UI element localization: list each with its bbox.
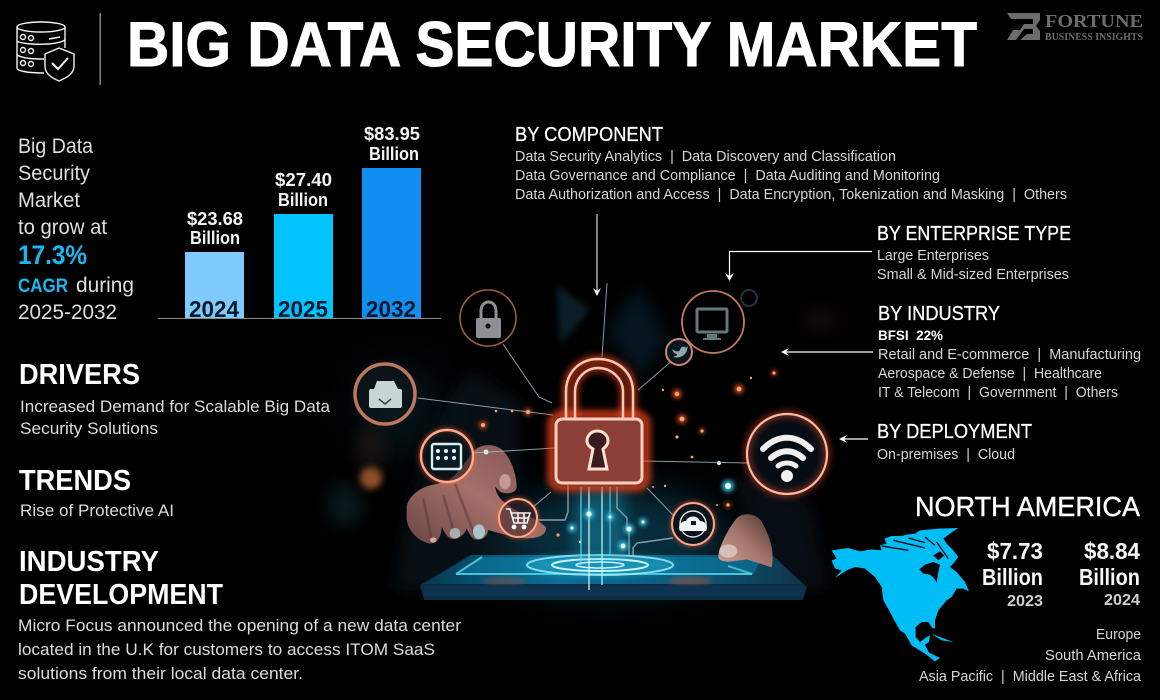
other regions [919,626,1142,685]
growth callout: CAGR [18,276,68,297]
arrow: industry [781,348,873,356]
trends: Rise of Protective AI [20,501,174,520]
logo: BUSINESS INSIGHTS [1045,32,1143,43]
cyan data dots [484,450,734,551]
regional heading: NORTH AMERICA [915,491,1140,522]
icon: twitter circle [666,339,692,365]
growth callout [18,135,134,324]
connector lines [418,283,748,515]
by industry [878,303,1141,401]
growth callout: 2025-2032 [18,301,117,324]
icon: bag circle [354,363,416,425]
by industry: Aerospace & Defense | Healthcare [878,365,1102,382]
by component: BY COMPONENT [515,124,663,146]
logo [1007,11,1143,43]
right hand [718,514,773,567]
by component: Data Governance and Compliance | Data Auditing and Monitoring [515,167,940,184]
bar chart: $23.68 [187,209,243,229]
industry development: located in the U.K for customers to access ITOM SaaS [18,640,435,659]
by enterprise type: Large Enterprises [877,247,989,264]
logo: FORTUNE [1045,11,1143,31]
regional values: 2023 [1007,593,1043,610]
by component [515,124,1067,203]
growth callout: Market [18,189,80,212]
industry development: Micro Focus announced the opening of a new data center [18,616,461,635]
arrow: enterprise [725,252,872,281]
growth callout: Security [18,162,90,185]
by enterprise type: Small & Mid-sized Enterprises [877,266,1069,283]
by deployment: BY DEPLOYMENT [877,421,1032,443]
tablet [420,554,807,600]
by enterprise type: BY ENTERPRISE TYPE [877,223,1071,245]
by deployment [877,421,1032,463]
other regions: Europe [1096,626,1141,643]
bar chart: $27.40 [275,170,332,190]
industry development: solutions from their local data center. [18,664,303,683]
icon: lock circle [460,290,516,346]
growth callout: Big Data [18,135,93,158]
arrow: deployment [839,435,868,443]
header divider [100,13,101,85]
regional values: Billion [982,564,1043,590]
drivers [19,359,331,438]
trends [19,465,174,520]
by industry: BY INDUSTRY [878,303,1000,325]
icon: central padlock [552,359,646,487]
by industry: BFSI 22% [878,328,943,343]
by industry: Retail and E-commerce | Manufacturing [878,346,1141,363]
icon: monitor circle [682,291,744,353]
left hand [407,445,546,544]
regional values [982,538,1140,610]
bar chart: Billion [278,190,328,210]
regional values: 2024 [1104,592,1140,609]
regional values: $7.73 [987,538,1043,564]
title: BIG DATA SECURITY MARKET [127,10,977,80]
by deployment: On-premises | Cloud [877,446,1015,463]
regional values: $8.84 [1084,538,1140,564]
icon: faint badge [741,290,757,306]
industry development: DEVELOPMENT [19,579,223,611]
drivers: Increased Demand for Scalable Big Data [20,397,331,416]
icon: keypad circle [421,430,473,482]
arrow: component [593,214,601,296]
icon: cart circle [499,499,537,537]
growth callout: 17.3% [18,240,87,270]
orange spark dots [479,370,777,537]
trends: TRENDS [19,465,131,497]
growth callout: during [76,274,134,297]
data lines beneath lock [537,485,673,590]
map: north america [832,528,969,661]
bar chart: 2024 [189,296,239,322]
industry development [18,546,461,683]
growth callout: to grow at [18,216,107,239]
bar chart: 2025 [278,296,328,322]
other regions: South America [1045,647,1142,664]
bar chart: $83.95 [364,124,420,144]
drivers: Security Solutions [20,419,158,438]
icon: cloud circle [672,503,714,545]
by enterprise type [877,223,1071,283]
data glow under lock [575,490,625,560]
regional values: Billion [1079,564,1140,590]
drivers: DRIVERS [19,359,140,391]
bar chart [158,124,441,322]
bar chart: 2032 [366,296,416,322]
industry development: INDUSTRY [19,546,159,578]
other regions: Asia Pacific | Middle East & Africa [919,668,1142,685]
icon: database with shield [17,22,74,81]
central photo: person with tablet [327,283,838,600]
by industry: IT & Telecom | Government | Others [878,384,1118,401]
bar chart: Billion [369,144,419,164]
icon: wifi circle [747,414,827,494]
bar chart: Billion [190,228,240,248]
by component: Data Authorization and Access | Data Encryption, Tokenization and Masking | Others [515,186,1067,203]
by component: Data Security Analytics | Data Discovery and Classification [515,148,896,165]
